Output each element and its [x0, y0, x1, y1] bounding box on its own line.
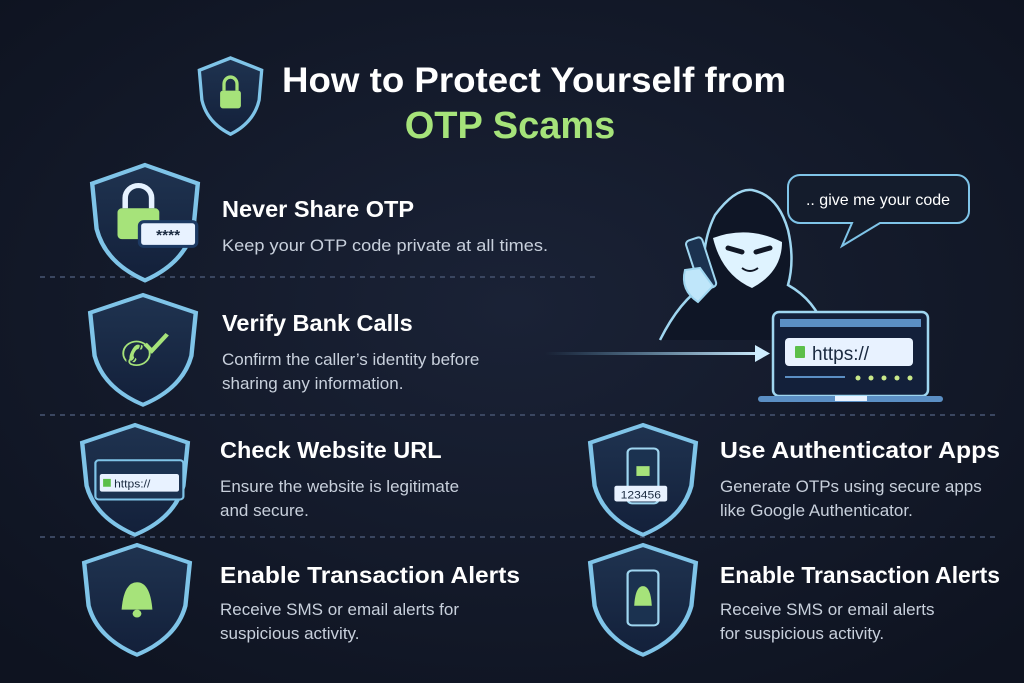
panel: enable transaction alerts left — [84, 545, 520, 655]
icon: shield lock — [92, 165, 198, 280]
panel: use authenticator apps: like Google Authenticator. — [720, 501, 913, 520]
laptop: https:// — [812, 344, 870, 365]
hacker figure — [660, 190, 835, 340]
panel: never share otp: Keep your OTP code private at all times. — [222, 236, 548, 255]
panel: check website url: and secure. — [220, 501, 309, 520]
panel: never share otp — [92, 165, 548, 280]
title: OTP Scams — [405, 105, 615, 147]
title: How to Protect Yourself from — [282, 60, 786, 100]
panel: check website url: Ensure the website is legitimate — [220, 477, 459, 496]
icon: shield browser — [82, 425, 188, 535]
title — [282, 60, 786, 147]
arrow — [545, 345, 770, 362]
panel: enable transaction alerts left: Receive SMS or email alerts for — [220, 600, 459, 619]
panel: enable transaction alerts right — [590, 545, 1000, 655]
panel: never share otp: Never Share OTP — [222, 196, 414, 222]
panel: enable transaction alerts right: Receive SMS or email alerts — [720, 600, 934, 619]
icon: shield lock: **** — [156, 229, 180, 244]
illustration: hacker with laptop — [545, 175, 969, 402]
panel: verify bank calls — [90, 295, 479, 405]
panel: verify bank calls: Verify Bank Calls — [222, 310, 413, 336]
icon: shield browser: https:// — [114, 479, 151, 491]
panel: check website url: Check Website URL — [220, 437, 442, 463]
icon: shield phone: ✆ — [121, 335, 152, 373]
laptop — [758, 312, 943, 402]
panel: use authenticator apps: Use Authenticator Apps — [720, 437, 1000, 463]
panel: verify bank calls: Confirm the caller’s identity before — [222, 350, 479, 369]
icon: shield phone app: 123456 — [621, 490, 661, 501]
panel: enable transaction alerts right: Enable Transaction Alerts — [720, 562, 1000, 588]
panel: use authenticator apps: Generate OTPs using secure apps — [720, 477, 982, 496]
icon: shield phone — [90, 295, 196, 405]
panel: enable transaction alerts left: suspicious activity. — [220, 624, 360, 643]
panel: use authenticator apps — [590, 425, 1000, 535]
speech bubble — [788, 175, 969, 246]
icon: shield phone bell — [590, 545, 696, 655]
icon: shield bell — [84, 545, 190, 655]
speech bubble: .. give me your code — [806, 192, 950, 209]
panel: verify bank calls: sharing any information. — [222, 374, 403, 393]
panel: enable transaction alerts right: for suspicious activity. — [720, 624, 884, 643]
icon: header shield — [199, 58, 262, 134]
panel: check website url — [82, 425, 459, 535]
panel: enable transaction alerts left: Enable Transaction Alerts — [220, 562, 520, 588]
icon: shield phone app — [590, 425, 696, 535]
